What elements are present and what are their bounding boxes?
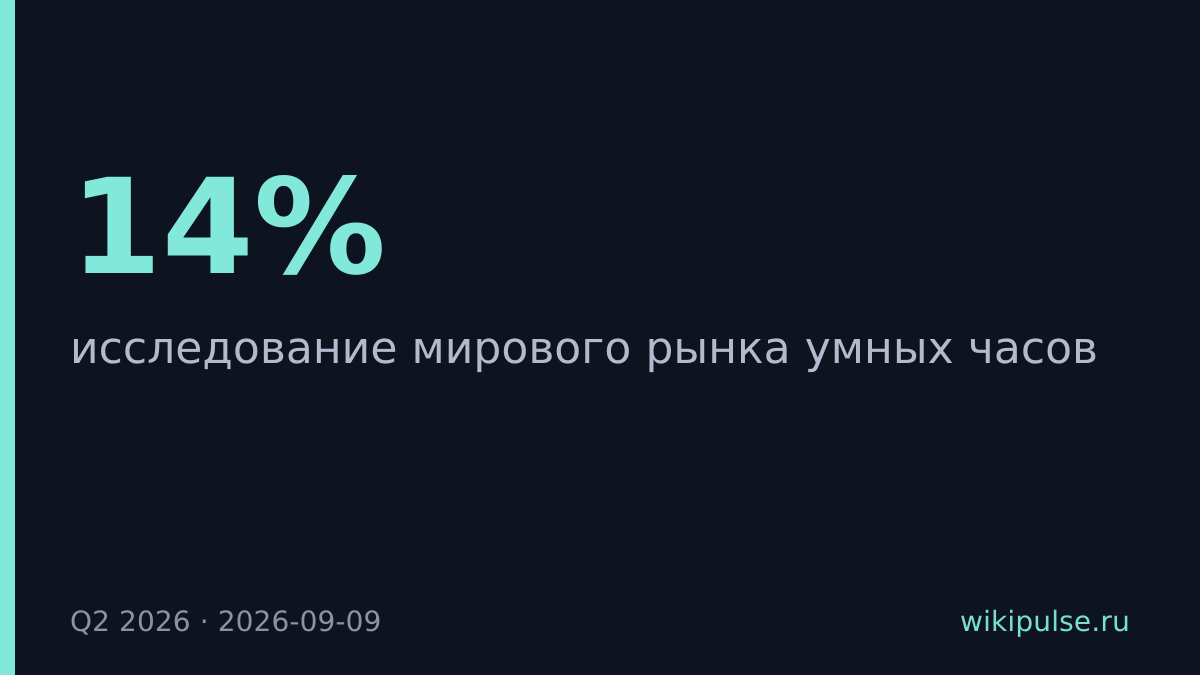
source site: wikipulse.ru	[960, 605, 1130, 638]
big number: 14%	[70, 151, 386, 305]
accent bar	[0, 0, 15, 675]
subtitle: исследование мирового рынка умных часов	[70, 323, 1098, 374]
date label: Q2 2026 · 2026-09-09	[70, 605, 381, 638]
